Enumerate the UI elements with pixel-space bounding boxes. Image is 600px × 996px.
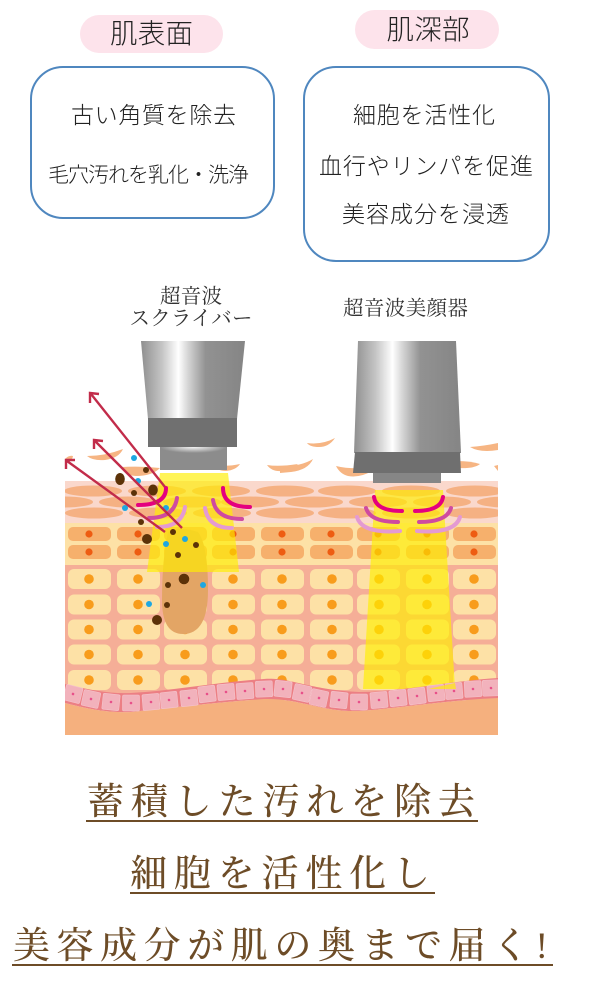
panel: deep skin effects xyxy=(304,67,549,261)
label pill: 肌深部: 肌深部 xyxy=(386,14,470,45)
skin cross-section diagram xyxy=(65,438,498,735)
sound waves: scrubber xyxy=(138,488,250,528)
brown dirt particles xyxy=(115,467,199,625)
label pill: 肌深部 xyxy=(355,10,499,49)
panel: deep skin effects: 血行やリンパを促進 xyxy=(319,153,533,179)
panel: skin surface effects xyxy=(31,67,274,218)
lower cream cells xyxy=(68,569,496,690)
lower tissue background xyxy=(65,565,498,700)
ultrasound beam: facial device xyxy=(363,490,455,689)
epidermis flake cells xyxy=(65,486,498,518)
device label: 超音波スクライバー xyxy=(130,285,252,330)
headline line 1: 蓄積した汚れを除去 xyxy=(87,781,475,823)
blue particles xyxy=(122,455,206,607)
device probe: facial device xyxy=(353,341,461,483)
basal membrane band xyxy=(65,678,498,712)
red arrows: dirt expelled xyxy=(66,393,182,532)
panel: deep skin effects: 美容成分を浸透 xyxy=(342,201,509,227)
ultrasound beam: scrubber xyxy=(147,473,239,572)
basal cells xyxy=(63,680,500,711)
epidermis surface layer xyxy=(65,481,498,524)
panel: skin surface effects: 毛穴汚れを乳化・洗浄 xyxy=(48,164,249,187)
device label: 超音波スクライバー: 超音波 xyxy=(160,285,222,308)
panel: skin surface effects: 古い角質を除去 xyxy=(71,102,236,128)
label pill: 肌表面 xyxy=(80,15,223,53)
dermis base xyxy=(65,698,498,735)
device label: 超音波スクライバー: スクライバー xyxy=(130,308,252,330)
floating skin flakes xyxy=(65,438,498,476)
headline line 2: 細胞を活性化し xyxy=(130,853,430,895)
device probe: scrubber xyxy=(141,341,245,470)
panel: deep skin effects: 細胞を活性化 xyxy=(353,102,495,128)
upper cell band xyxy=(65,523,498,565)
hair follicle pore xyxy=(162,529,208,634)
label pill: 肌表面: 肌表面 xyxy=(110,18,193,49)
device label: 超音波美顔器: 超音波美顔器 xyxy=(343,297,468,320)
sound waves: facial device xyxy=(357,497,460,531)
headline line 3: 美容成分が肌の奥まで届く! xyxy=(13,925,548,967)
beam tip over basal band xyxy=(428,683,456,689)
upper orange cells xyxy=(68,527,496,559)
